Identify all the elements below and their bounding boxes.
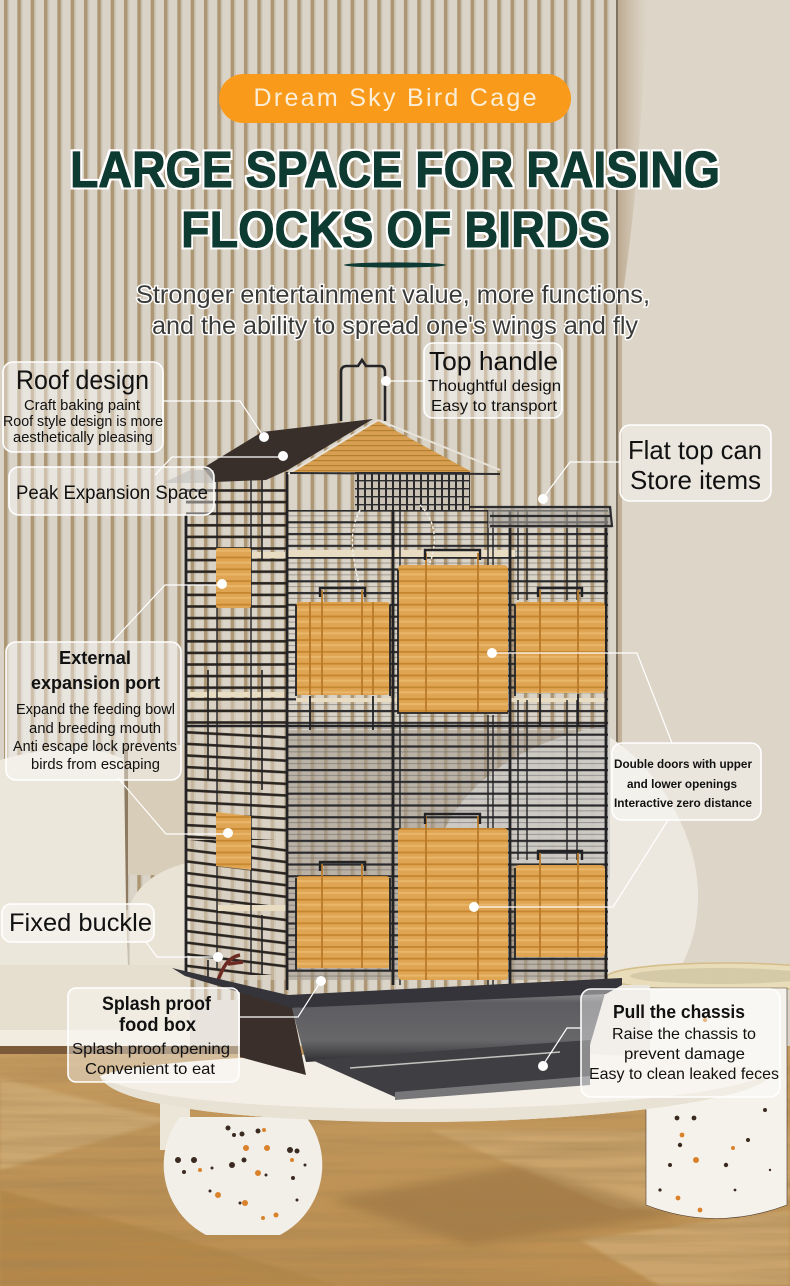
callout: pull the chassis: Pull the chassis: [613, 1002, 745, 1022]
callout: external expansion port: birds from escaping: [31, 757, 160, 773]
cage: upper doors: [296, 565, 605, 713]
callout: external expansion port: Anti escape lock prevents: [13, 739, 177, 755]
cage: left side upper wires: [186, 485, 288, 725]
cage: interior haze, lower half: [288, 730, 606, 980]
cage: left chassis: [240, 990, 306, 1075]
title: FLOCKS OF BIRDS: [181, 201, 610, 258]
callout: double doors: [469, 648, 761, 912]
cage: pull-out drawer: [312, 1040, 590, 1097]
title: LARGE SPACE FOR RAISING: [70, 141, 720, 198]
bird cage: [163, 360, 622, 1100]
cage: wooden shelves: [190, 550, 606, 911]
callout: roof design: aesthetically pleasing: [13, 429, 153, 446]
subtitle: and the ability to spread one's wings and fly: [152, 312, 638, 340]
callout: roof design: Craft baking paint: [24, 397, 141, 414]
callout: top handle: Thoughtful design: [428, 378, 561, 395]
background: striped wall: [0, 0, 790, 1000]
badge: product name: Dream Sky Bird Cage: [254, 84, 536, 112]
title: [70, 141, 720, 258]
cage: vertical posts and bars: [186, 455, 606, 990]
callout: external expansion port: Expand the feeding bowl: [16, 702, 175, 718]
callout: splash proof food box: [68, 976, 326, 1082]
callout: top handle: Easy to transport: [431, 398, 558, 415]
cage: front chassis: [292, 990, 606, 1062]
callout: fixed buckle: Fixed buckle: [9, 909, 152, 937]
background: speckled cylinder stool: [646, 988, 787, 1218]
cage: door latches: [296, 550, 582, 970]
cage: feeding basket: [355, 472, 470, 510]
cage: flat top: [470, 507, 612, 528]
badge: product name: [219, 74, 571, 123]
callout: pull the chassis: prevent damage: [624, 1046, 745, 1063]
background: sofa and armchair: [0, 700, 698, 1046]
callout: fixed buckle: [2, 904, 223, 962]
cage: grey curved perch: [430, 725, 610, 880]
callout: peak expansion space: [9, 451, 288, 515]
callout: peak expansion space: Peak Expansion Space: [16, 483, 208, 504]
subtitle: [136, 281, 650, 340]
subtitle: Stronger entertainment value, more functions,: [136, 281, 650, 309]
cage: front wires: [288, 510, 608, 980]
cage: white hanging rope: [352, 505, 434, 585]
cage: roof: [203, 419, 373, 482]
callout: top handle: [381, 343, 562, 418]
callout: flat top: Store items: [630, 465, 761, 495]
callout: splash proof food box: food box: [119, 1015, 196, 1036]
title underline: [344, 262, 446, 268]
callout: double doors: Double doors with upper: [614, 757, 752, 771]
cage: peak extension ghost: [163, 470, 214, 514]
callout: splash proof food box: Splash proof opening: [72, 1041, 230, 1058]
icon: speckled round leg: [164, 1117, 322, 1235]
cage: left side lower wires: [186, 840, 288, 975]
callout: flat top: [538, 425, 771, 504]
callout: roof design: [3, 362, 269, 452]
callout: roof design: Roof style design is more: [3, 413, 163, 430]
callout: top handle: Top handle: [429, 346, 558, 376]
callout: external expansion port: [6, 579, 233, 838]
callout: external expansion port: expansion port: [31, 673, 160, 693]
icon: top handle: [341, 360, 385, 421]
callout: external expansion port: External: [59, 648, 131, 668]
cage: door bars: [310, 553, 578, 980]
callout: double doors: Interactive zero distance: [614, 796, 752, 810]
cage: lower doors: [296, 828, 605, 980]
callout: external expansion port: and breeding mouth: [29, 721, 161, 737]
callout: double doors: and lower openings: [627, 777, 737, 791]
cage: left side middle wires: [186, 725, 288, 840]
background: round side table top: [607, 963, 790, 991]
display table: [100, 1052, 770, 1235]
background: wooden floor: [0, 1046, 790, 1286]
cage: tray rim: [172, 968, 622, 1008]
callout: flat top: Flat top can: [628, 435, 762, 465]
callout: pull the chassis: Easy to clean leaked feces: [589, 1066, 779, 1083]
callout: splash proof food box: Splash proof: [102, 994, 212, 1015]
background: white behind right of chassis: [590, 985, 650, 1080]
callout: roof design: Roof design: [16, 365, 149, 395]
cage: gable end: [290, 421, 472, 472]
cage: small left doors: [216, 548, 251, 870]
callout: pull the chassis: Raise the chassis to: [612, 1026, 756, 1043]
icon: red fixed buckle strap: [216, 955, 243, 985]
callout: pull the chassis: [538, 989, 780, 1097]
callout: splash proof food box: Convenient to eat: [85, 1061, 216, 1078]
